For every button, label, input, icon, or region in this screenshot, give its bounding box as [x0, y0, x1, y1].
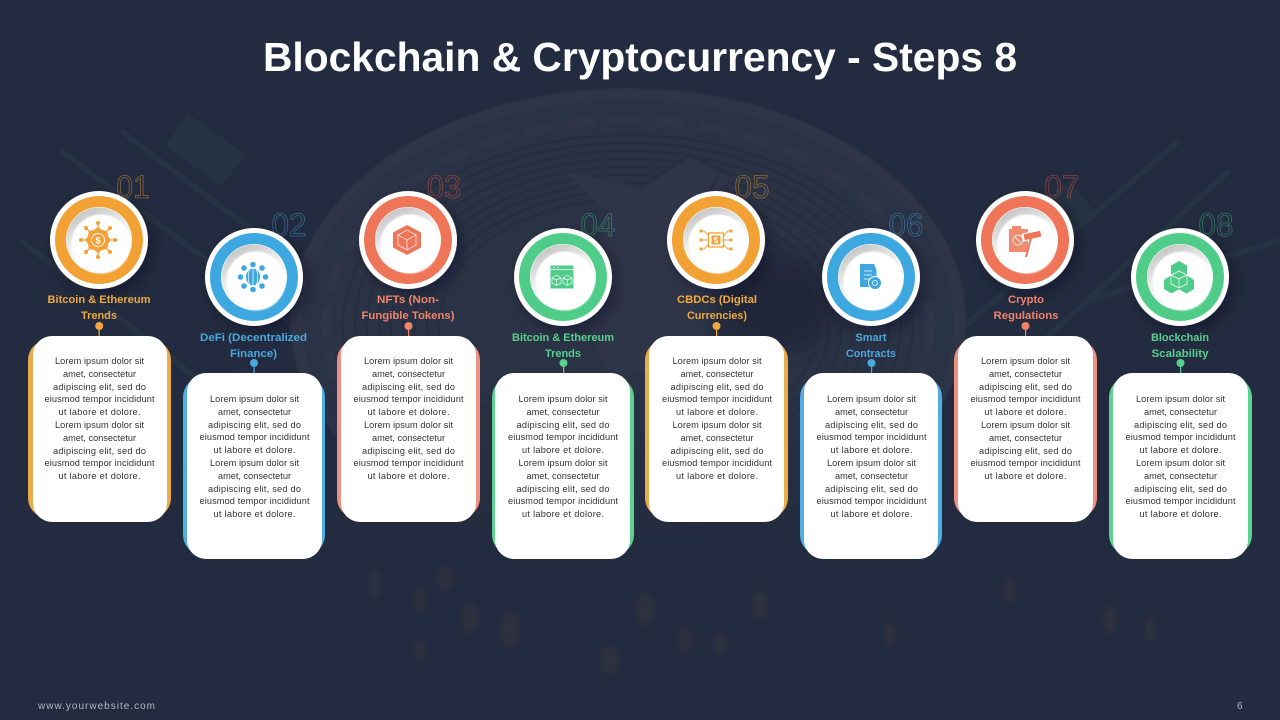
card 05: amet, consectetur — [680, 369, 754, 379]
card 08: Lorem ipsum dolor sit — [1136, 458, 1225, 468]
card 02: Lorem ipsum dolor sit — [210, 458, 299, 468]
number 01: 01 — [116, 169, 150, 205]
label 06 — [846, 332, 896, 360]
card 07: adipiscing elit, sed do — [979, 446, 1072, 456]
card 07: eiusmod tempor incididunt — [970, 458, 1081, 468]
card 01: eiusmod tempor incididunt — [44, 394, 155, 404]
card 01 — [28, 336, 171, 522]
card 01: ut labore et dolore. — [58, 407, 140, 417]
card 04: amet, consectetur — [526, 471, 600, 481]
card 07: eiusmod tempor incididunt — [970, 394, 1081, 404]
title: Blockchain & Cryptocurrency - Steps 8 — [263, 34, 1017, 80]
card 02: amet, consectetur — [218, 471, 291, 481]
card 04: adipiscing elit, sed do — [516, 420, 610, 430]
label 01 — [48, 294, 151, 322]
card 07: amet, consectetur — [989, 433, 1062, 443]
connector 02 — [250, 359, 258, 374]
number 06: 06 — [888, 207, 924, 243]
icon: crypto hub — [79, 221, 117, 259]
card 04: ut labore et dolore. — [522, 445, 604, 455]
label 02: Finance) — [230, 348, 277, 360]
label 03: Fungible Tokens) — [362, 310, 455, 322]
label 04: Trends — [545, 348, 581, 360]
card 02: adipiscing elit, sed do — [208, 484, 301, 494]
label 06: Contracts — [846, 348, 896, 360]
card 07 — [954, 336, 1097, 522]
card 03: amet, consectetur — [372, 369, 445, 379]
step 04 panel — [492, 207, 634, 559]
card 08: ut labore et dolore. — [1140, 445, 1222, 455]
number 05: 05 — [734, 169, 770, 205]
card 02: Lorem ipsum dolor sit — [210, 394, 299, 404]
card 02 — [183, 373, 325, 559]
card 01: ut labore et dolore. — [58, 471, 140, 481]
icon: three hexagons with cube — [1164, 261, 1194, 294]
icon: globe network — [238, 262, 268, 292]
label 08: Scalability — [1152, 348, 1209, 360]
card 08: adipiscing elit, sed do — [1134, 484, 1227, 494]
card 07: amet, consectetur — [989, 369, 1062, 379]
label 04 — [512, 332, 614, 360]
card 02: ut labore et dolore. — [214, 509, 296, 519]
card 05: ut labore et dolore. — [676, 471, 758, 481]
icon: crypto hub: $ — [95, 235, 101, 245]
icon: hexagonal cube — [393, 225, 421, 255]
number 08: 08 — [1198, 207, 1234, 243]
label 07 — [994, 294, 1058, 322]
card 08: eiusmod tempor incididunt — [1126, 432, 1236, 442]
circle badge 06 — [822, 228, 920, 326]
label 02 — [200, 332, 307, 360]
card 03 — [337, 336, 480, 522]
card 05: Lorem ipsum dolor sit — [672, 420, 762, 430]
card 05: Lorem ipsum dolor sit — [672, 356, 762, 366]
card 03: ut labore et dolore. — [368, 407, 450, 417]
card 01: adipiscing elit, sed do — [53, 382, 146, 392]
label 03 — [362, 294, 455, 322]
card 04: ut labore et dolore. — [522, 509, 604, 519]
card 05: amet, consectetur — [680, 433, 754, 443]
card 05: eiusmod tempor incididunt — [662, 458, 772, 468]
card 03: adipiscing elit, sed do — [362, 446, 455, 456]
label 07: Regulations — [994, 310, 1058, 322]
card 08: Lorem ipsum dolor sit — [1136, 394, 1225, 404]
connector 05 — [712, 322, 720, 337]
card 08: eiusmod tempor incididunt — [1126, 496, 1236, 506]
card 05: adipiscing elit, sed do — [670, 382, 764, 392]
connector 08 — [1176, 359, 1184, 374]
card 06: Lorem ipsum dolor sit — [827, 394, 916, 404]
card 08: adipiscing elit, sed do — [1134, 420, 1227, 430]
card 04: adipiscing elit, sed do — [516, 484, 610, 494]
page number: 6 — [1237, 701, 1243, 712]
card 03: eiusmod tempor incididunt — [354, 458, 464, 468]
card 07: adipiscing elit, sed do — [979, 382, 1072, 392]
card 02: eiusmod tempor incididunt — [200, 432, 310, 442]
card 01: amet, consectetur — [63, 369, 136, 379]
card 06: eiusmod tempor incididunt — [816, 496, 927, 506]
icon: digital currency chip: $ — [714, 236, 719, 245]
card 04: eiusmod tempor incididunt — [508, 496, 618, 506]
circle badge 04 — [514, 228, 612, 326]
label 01: Trends — [81, 310, 117, 322]
card 07: Lorem ipsum dolor sit — [981, 356, 1070, 366]
label 05: Currencies) — [687, 310, 747, 322]
step 07 panel — [954, 169, 1097, 522]
card 02: eiusmod tempor incididunt — [200, 496, 310, 506]
connector 03 — [404, 322, 412, 337]
card 04: eiusmod tempor incididunt — [508, 432, 618, 442]
card 01: Lorem ipsum dolor sit — [55, 356, 144, 366]
card 05: eiusmod tempor incididunt — [662, 394, 772, 404]
card 06: eiusmod tempor incididunt — [816, 432, 927, 442]
card 05: ut labore et dolore. — [676, 407, 758, 417]
card 06: ut labore et dolore. — [830, 509, 912, 519]
circle badge 01 — [50, 191, 148, 289]
connector 01 — [95, 322, 103, 337]
step 05 panel — [645, 169, 788, 522]
connector 04 — [560, 359, 568, 374]
card 05: adipiscing elit, sed do — [670, 446, 764, 456]
connector 06 — [868, 359, 876, 374]
card 08: amet, consectetur — [1144, 471, 1217, 481]
card 08 — [1109, 373, 1252, 559]
card 01: eiusmod tempor incididunt — [44, 458, 155, 468]
card 07: ut labore et dolore. — [984, 471, 1066, 481]
card 06 — [800, 373, 942, 559]
card 06: adipiscing elit, sed do — [825, 484, 918, 494]
number 03: 03 — [427, 169, 461, 205]
label 05 — [677, 294, 757, 322]
card 04 — [492, 373, 634, 559]
card 04: amet, consectetur — [526, 407, 600, 417]
card 06: amet, consectetur — [835, 471, 908, 481]
card 03: Lorem ipsum dolor sit — [364, 420, 453, 430]
card 01: adipiscing elit, sed do — [53, 446, 146, 456]
label 07: Crypto — [1008, 294, 1044, 306]
step 08 panel — [1109, 207, 1252, 559]
circle badge 02 — [205, 228, 303, 326]
card 06: ut labore et dolore. — [830, 445, 912, 455]
step 03 panel — [337, 169, 480, 522]
connector 07 — [1022, 322, 1030, 337]
card 08: ut labore et dolore. — [1140, 509, 1222, 519]
card 01: amet, consectetur — [63, 433, 136, 443]
card 06: amet, consectetur — [835, 407, 908, 417]
circle badge 07 — [976, 191, 1074, 289]
card 03: amet, consectetur — [372, 433, 445, 443]
card 02: adipiscing elit, sed do — [208, 420, 301, 430]
icon: clipboard and gavel — [1009, 226, 1043, 257]
card 03: Lorem ipsum dolor sit — [364, 356, 453, 366]
step 06 panel — [800, 207, 942, 559]
card 07: ut labore et dolore. — [984, 407, 1066, 417]
card 03: adipiscing elit, sed do — [362, 382, 455, 392]
icon: smart contract document — [860, 264, 882, 290]
icon: browser window with cubes — [550, 266, 574, 288]
label 04: Bitcoin & Ethereum — [512, 332, 614, 344]
icon: digital currency chip — [699, 229, 733, 251]
card 02: amet, consectetur — [218, 407, 291, 417]
label 03: NFTs (Non- — [377, 294, 439, 306]
card 06: adipiscing elit, sed do — [825, 420, 918, 430]
card 05 — [645, 336, 788, 522]
card 01: Lorem ipsum dolor sit — [55, 420, 144, 430]
label 08 — [1151, 332, 1209, 360]
footer website: www.yourwebsite.com — [37, 701, 155, 712]
label 06: Smart — [856, 332, 887, 344]
circle badge 08 — [1131, 228, 1229, 326]
card 07: Lorem ipsum dolor sit — [981, 420, 1070, 430]
number 07: 07 — [1044, 169, 1080, 205]
step 01 panel — [28, 169, 171, 522]
card 06: Lorem ipsum dolor sit — [827, 458, 916, 468]
number 04: 04 — [580, 207, 616, 243]
circle badge 05 — [667, 191, 765, 289]
card 03: ut labore et dolore. — [368, 471, 450, 481]
card 04: Lorem ipsum dolor sit — [518, 458, 608, 468]
step 02 panel — [183, 207, 325, 559]
label 01: Bitcoin & Ethereum — [48, 294, 151, 306]
label 08: Blockchain — [1151, 332, 1209, 344]
label 02: DeFi (Decentralized — [200, 332, 307, 344]
circle badge 03 — [359, 191, 457, 289]
card 04: Lorem ipsum dolor sit — [518, 394, 608, 404]
card 03: eiusmod tempor incididunt — [354, 394, 464, 404]
card 08: amet, consectetur — [1144, 407, 1217, 417]
label 05: CBDCs (Digital — [677, 294, 757, 306]
card 02: ut labore et dolore. — [214, 445, 296, 455]
number 02: 02 — [272, 207, 306, 243]
